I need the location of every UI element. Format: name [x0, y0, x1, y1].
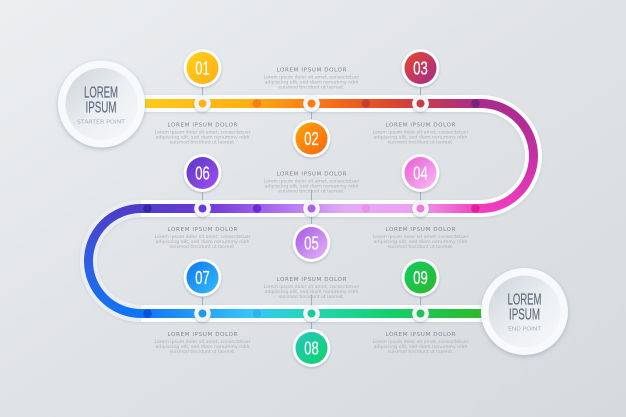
text block 02: Lorem ipsum dolor sit amet, consectetuer: [264, 74, 360, 80]
bottom segment: [141, 309, 486, 318]
node 08: [303, 305, 320, 322]
text block 04: LOREM IPSUM DOLOR: [386, 227, 456, 233]
right curve: [481, 104, 534, 208]
text block 05: euismod tincidunt ut laoreet.: [278, 188, 344, 194]
left curve band: [89, 208, 141, 314]
node 03: [412, 95, 429, 112]
starter point circle: IPSUM: [86, 100, 116, 116]
text block 06: adipiscing elit, sed diam nonummy nibh: [156, 239, 250, 245]
node 06: [194, 200, 211, 217]
text block 05: LOREM IPSUM DOLOR: [276, 171, 347, 177]
badge 09: [402, 258, 440, 296]
text block 01: adipiscing elit, sed diam nonummy nibh: [156, 134, 250, 140]
text block 04: euismod tincidunt ut laoreet.: [388, 244, 454, 250]
white track band: [89, 104, 534, 314]
text block 08: Lorem ipsum dolor sit amet, consectetuer: [264, 284, 360, 290]
top segment: [140, 99, 481, 108]
starter point circle: STARTER POINT: [77, 120, 126, 126]
text block 06: [154, 227, 251, 250]
left curve: [89, 208, 141, 314]
badge 07: [184, 258, 222, 296]
badge 08: [292, 329, 330, 367]
text block 01: [154, 122, 251, 145]
text block 01: LOREM IPSUM DOLOR: [168, 122, 238, 128]
text block 08: LOREM IPSUM DOLOR: [276, 277, 347, 283]
text block 06: LOREM IPSUM DOLOR: [168, 227, 238, 233]
text block 09: euismod tincidunt ut laoreet.: [388, 349, 454, 355]
badge 03: [402, 49, 440, 87]
node 05: [303, 200, 320, 217]
end point circle: LOREM: [508, 292, 542, 308]
text block 01: Lorem ipsum dolor sit amet, consectetuer: [154, 129, 251, 135]
badge 04: 04: [413, 163, 428, 184]
text block 02: adipiscing elit, sed diam nonummy nibh: [264, 79, 359, 85]
node 01: [194, 95, 211, 112]
text block 07: LOREM IPSUM DOLOR: [168, 332, 238, 338]
badge 09: 09: [413, 267, 428, 288]
badge 08: 08: [304, 338, 319, 359]
text block 03: euismod tincidunt ut laoreet.: [388, 139, 454, 145]
text block 02: LOREM IPSUM DOLOR: [276, 67, 347, 73]
end point circle: IPSUM: [509, 306, 540, 324]
text block 03: adipiscing elit, sed diam nonummy nibh: [374, 134, 468, 140]
badge 04: [402, 154, 440, 192]
text block 03: [372, 122, 469, 145]
text block 08: euismod tincidunt ut laoreet.: [278, 294, 344, 300]
text block 06: Lorem ipsum dolor sit amet, consectetuer: [154, 234, 251, 240]
text block 06: euismod tincidunt ut laoreet.: [170, 244, 236, 250]
text block 01: euismod tincidunt ut laoreet.: [170, 139, 236, 145]
node 07: [194, 305, 211, 322]
text block 09: Lorem ipsum dolor sit amet, consectetuer: [372, 339, 469, 345]
text block 05: Lorem ipsum dolor sit amet, consectetuer: [264, 178, 360, 184]
text block 09: [372, 332, 469, 355]
badge 06: [184, 154, 222, 192]
starter point circle: [58, 60, 145, 148]
text block 04: Lorem ipsum dolor sit amet, consectetuer: [372, 234, 469, 240]
text block 08: adipiscing elit, sed diam nonummy nibh: [264, 289, 359, 295]
badge 02: 02: [304, 128, 319, 149]
text block 03: Lorem ipsum dolor sit amet, consectetuer: [372, 129, 469, 135]
text block 04: [372, 227, 469, 250]
connector lines: [202, 86, 420, 330]
badge 05: [292, 224, 330, 262]
text block 09: adipiscing elit, sed diam nonummy nibh: [374, 344, 468, 350]
badge 01: 01: [195, 58, 210, 79]
text block 08: [264, 277, 360, 300]
winding timeline track: [89, 99, 534, 318]
text block 05: adipiscing elit, sed diam nonummy nibh: [264, 183, 359, 189]
text block 02: euismod tincidunt ut laoreet.: [278, 84, 344, 90]
text block 07: [154, 332, 251, 355]
text block 05: [264, 171, 360, 194]
badge 06: 06: [195, 163, 210, 184]
text block 04: adipiscing elit, sed diam nonummy nibh: [374, 239, 468, 245]
text block 07: Lorem ipsum dolor sit amet, consectetuer: [154, 339, 251, 345]
node 04: [412, 200, 429, 217]
starter point circle: LOREM: [84, 84, 118, 102]
node 02: [303, 95, 320, 112]
track accent dots: [143, 99, 480, 318]
text block 02: [264, 67, 360, 90]
end point circle: END POINT: [508, 326, 542, 332]
badge 01: [184, 49, 222, 87]
text block 03: LOREM IPSUM DOLOR: [386, 122, 456, 128]
node 09: [412, 305, 429, 322]
badge 05: 05: [304, 233, 319, 254]
text block 09: LOREM IPSUM DOLOR: [386, 332, 456, 338]
text block 07: euismod tincidunt ut laoreet.: [170, 349, 236, 355]
timeline nodes: [194, 95, 429, 322]
badge 07: 07: [195, 267, 210, 288]
badge 02: [292, 120, 330, 158]
badge 03: 03: [413, 58, 428, 79]
end point circle: [481, 268, 568, 355]
text block 07: adipiscing elit, sed diam nonummy nibh: [156, 344, 250, 350]
middle segment: [141, 204, 481, 213]
